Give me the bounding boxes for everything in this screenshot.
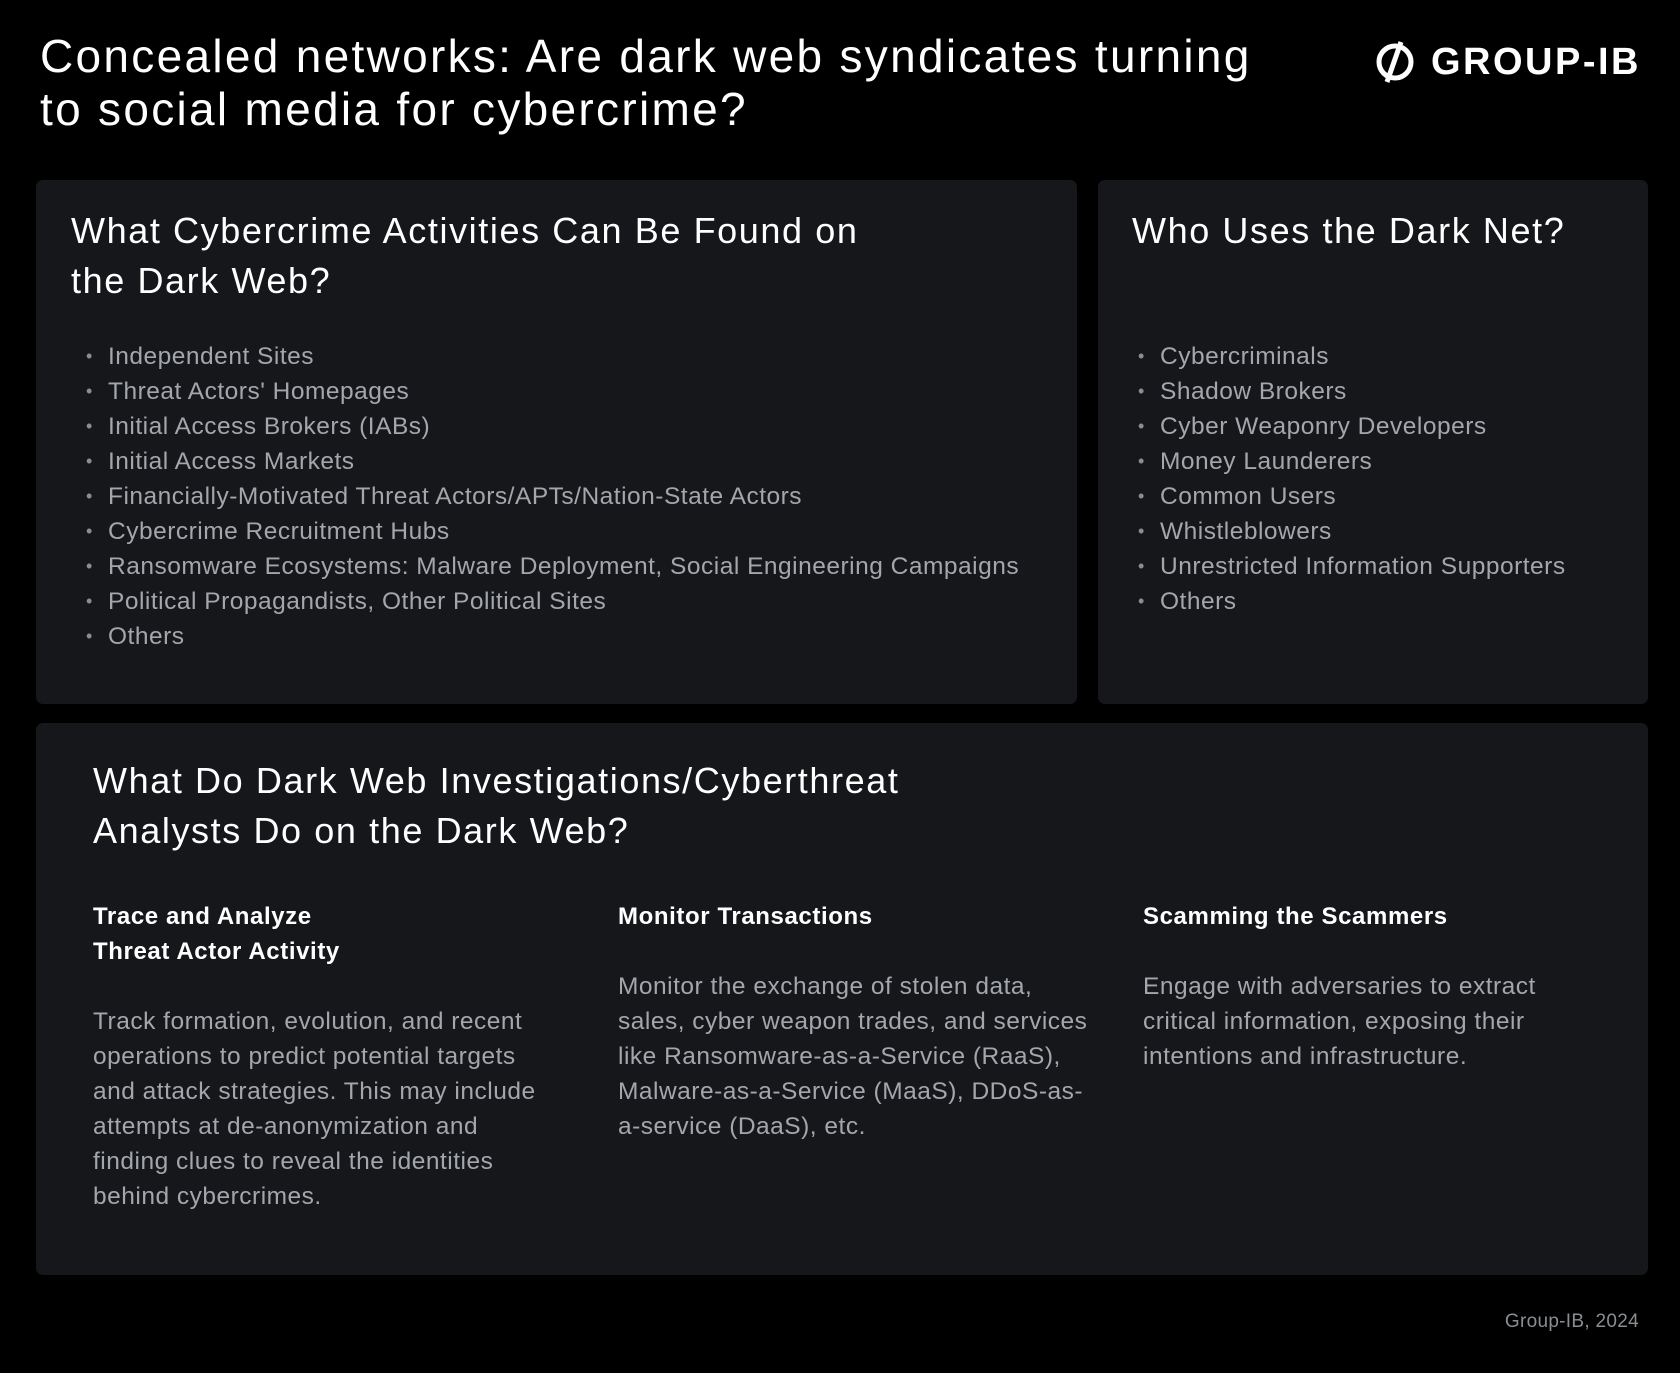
list: Threat Actors' Homepages — [108, 378, 409, 405]
panel: users — [1098, 180, 1648, 704]
column: trace: finding clues to reveal the identities — [93, 1148, 493, 1175]
heading: investigations: What Do Dark Web Investigations/Cyberthreat — [93, 760, 899, 801]
column: monitor: a-service (DaaS), etc. — [618, 1113, 866, 1140]
list: Initial Access Markets — [108, 448, 355, 475]
column: scamming: intentions and infrastructure. — [1143, 1043, 1467, 1070]
list: Others — [108, 623, 185, 650]
list — [86, 343, 1019, 650]
footer: Group-IB, 2024 — [1505, 1311, 1639, 1332]
column: trace: Threat Actor Activity — [93, 938, 340, 965]
column: trace: attempts at de-anonymization and — [93, 1113, 478, 1140]
column: monitor: sales, cyber weapon trades, and services — [618, 1008, 1087, 1035]
column: trace: Track formation, evolution, and recent — [93, 1008, 522, 1035]
list: Initial Access Brokers (IABs) — [108, 413, 430, 440]
column: trace: Trace and Analyze — [93, 903, 312, 930]
heading: the Dark Web? — [71, 260, 331, 301]
panel: investigations — [36, 723, 1648, 1275]
list: Unrestricted Information Supporters — [1160, 553, 1566, 580]
column: trace: behind cybercrimes. — [93, 1183, 322, 1210]
heading: investigations — [93, 760, 899, 851]
column: trace: operations to predict potential targets — [93, 1043, 516, 1070]
heading: Who Uses the Dark Net? — [1132, 210, 1565, 251]
column: scamming — [1143, 903, 1536, 1070]
column: monitor: like Ransomware-as-a-Service (RaaS), — [618, 1043, 1061, 1070]
list: Common Users — [1160, 483, 1336, 510]
title — [40, 30, 1252, 135]
list: Whistleblowers — [1160, 518, 1332, 545]
heading — [71, 210, 858, 301]
column: trace — [93, 903, 536, 1210]
heading: What Cybercrime Activities Can Be Found on — [71, 210, 858, 251]
column: monitor: Monitor Transactions — [618, 903, 873, 930]
title: Concealed networks: Are dark web syndicates turning — [40, 30, 1252, 82]
column: monitor: Monitor the exchange of stolen data, — [618, 973, 1032, 1000]
list — [1138, 343, 1566, 615]
column: monitor: Malware-as-a-Service (MaaS), DDoS-as- — [618, 1078, 1083, 1105]
list: Ransomware Ecosystems: Malware Deployment, Social Engineering Campaigns — [108, 553, 1019, 580]
heading: investigations: Analysts Do on the Dark Web? — [93, 810, 629, 851]
column: scamming: Scamming the Scammers — [1143, 903, 1448, 930]
logo: GROUP-IB — [1431, 41, 1641, 83]
list: Cybercrime Recruitment Hubs — [108, 518, 450, 545]
list: Political Propagandists, Other Political Sites — [108, 588, 606, 615]
list: Shadow Brokers — [1160, 378, 1347, 405]
list: Money Launderers — [1160, 448, 1372, 475]
list: Others — [1160, 588, 1237, 615]
list: Cybercriminals — [1160, 343, 1329, 370]
panel: activities — [36, 180, 1077, 704]
column: monitor — [618, 903, 1087, 1140]
list: Cyber Weaponry Developers — [1160, 413, 1487, 440]
list: Independent Sites — [108, 343, 314, 370]
column: trace: and attack strategies. This may include — [93, 1078, 536, 1105]
column: scamming: critical information, exposing their — [1143, 1008, 1525, 1035]
column: scamming: Engage with adversaries to extract — [1143, 973, 1536, 1000]
title: to social media for cybercrime? — [40, 83, 748, 135]
list: Financially-Motivated Threat Actors/APTs/Nation-State Actors — [108, 483, 802, 510]
